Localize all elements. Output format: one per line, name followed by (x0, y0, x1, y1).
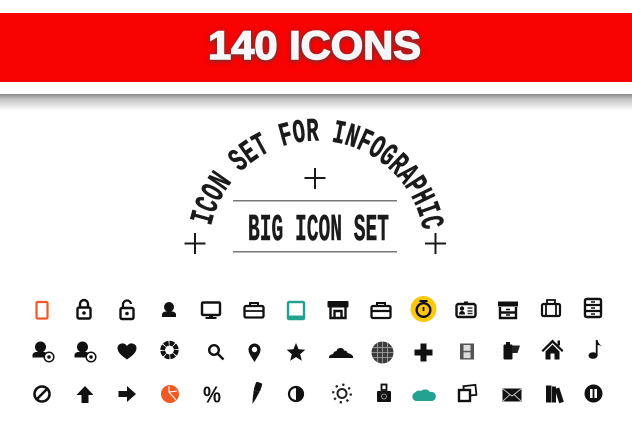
plus top (304, 168, 326, 189)
icon: film roll (504, 342, 520, 360)
icon: envelope (502, 388, 522, 402)
icon: aperture (163, 343, 176, 357)
icon: orange pie chart (161, 385, 179, 403)
icon: lock (78, 300, 90, 318)
icon: store (328, 301, 348, 318)
icon: user (162, 302, 176, 317)
icon: suitcase (542, 300, 560, 316)
icon: house (542, 340, 564, 360)
icon: orange tablet (36, 302, 48, 318)
banner title: 140 ICONS (208, 24, 421, 68)
plus left (184, 233, 206, 254)
icon: teal cloud (412, 389, 436, 401)
icon: pen (249, 382, 263, 405)
subheading: BIG ICON SET (248, 209, 389, 252)
icon: percent: % (203, 382, 221, 408)
icon: briefcase (244, 303, 264, 318)
icon: books (546, 386, 564, 403)
icon: teal tablet (288, 302, 304, 319)
plus right (425, 233, 446, 254)
icon: map pin (248, 344, 260, 362)
icon: open lock (120, 300, 134, 319)
emblem (184, 118, 446, 254)
icon: sun (333, 385, 351, 402)
icon: cabinet (585, 299, 601, 317)
icon: contrast circle (289, 387, 303, 401)
rule bottom (233, 251, 397, 252)
icon grid (32, 296, 603, 408)
icon: right arrow (118, 386, 136, 402)
icon: pause button (584, 384, 602, 402)
banner title: 140 ICONS (208, 25, 421, 69)
icon: film strip (460, 344, 474, 360)
icon: monitor (202, 302, 220, 319)
icon: up arrow (76, 386, 94, 403)
curved heading: ICON SET FOR INFOGRAPHIC (190, 118, 444, 229)
rule top (233, 200, 397, 202)
icon: user settings 2 (74, 342, 96, 362)
icon: black cloud (329, 348, 353, 358)
icon: music note (588, 340, 603, 359)
icon: heart (118, 343, 136, 360)
icon: magnifier (209, 345, 224, 360)
icon: no sign (34, 386, 50, 402)
icon: id card (456, 302, 476, 317)
icon: star (287, 343, 305, 361)
icon: photos (459, 385, 476, 401)
icon: globe (372, 342, 394, 364)
icon: archive drawers (498, 302, 518, 318)
icon: camera (377, 384, 391, 402)
icon: user settings 1 (32, 342, 54, 362)
icon: case (372, 303, 390, 318)
icon: plus (414, 344, 432, 362)
banner (0, 13, 632, 111)
icon: yellow stopwatch (410, 296, 436, 322)
